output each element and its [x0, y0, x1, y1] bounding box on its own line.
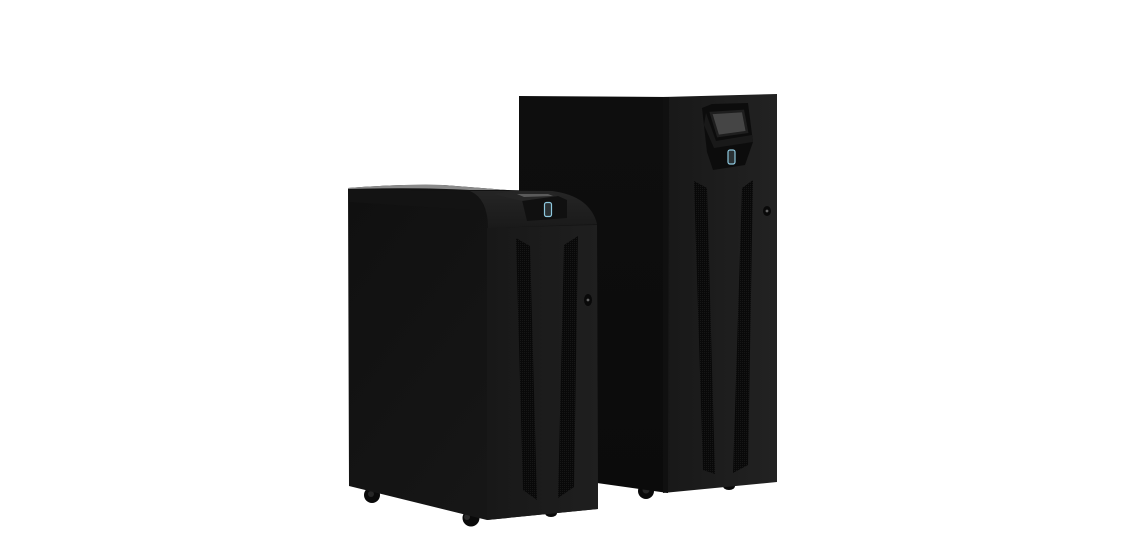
door lock: small — [584, 294, 592, 306]
hood: small — [470, 191, 597, 228]
front panel: small — [487, 225, 598, 520]
seam: tall — [663, 97, 669, 493]
front panel: tall — [663, 94, 777, 493]
wheel: tall left — [638, 483, 654, 499]
wheel: small right — [545, 509, 557, 517]
status indicator — [728, 150, 735, 164]
touch screen — [711, 111, 747, 136]
control panel: tall — [702, 103, 753, 170]
wheel: tall right — [723, 482, 735, 490]
vent: tall right — [733, 180, 753, 473]
small cabinet — [348, 185, 598, 527]
cabinet body: small — [348, 185, 598, 520]
side panel: tall — [519, 96, 669, 493]
wheel: small rear — [364, 487, 380, 503]
vent: small left — [516, 238, 537, 500]
status indicator — [544, 202, 552, 216]
vent: tall left — [694, 181, 715, 474]
vent: small right — [558, 236, 578, 498]
wheel: small front — [462, 510, 480, 526]
top screen edge — [493, 192, 558, 201]
door lock: tall — [763, 206, 771, 216]
top edge highlight — [348, 185, 507, 190]
side top strip — [348, 189, 485, 211]
control panel: small — [493, 192, 567, 221]
tall cabinet — [519, 94, 777, 499]
